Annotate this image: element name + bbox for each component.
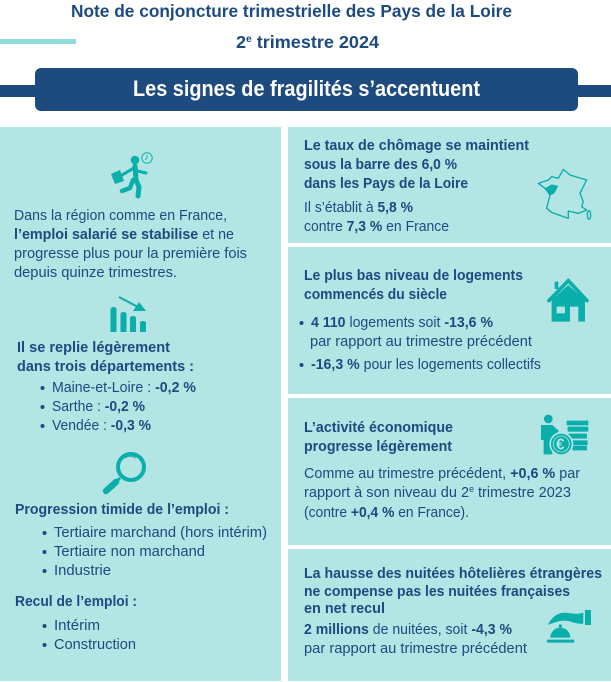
departments text: Sarthe : -0,2 % [52,398,145,415]
text: activite: Comme au trimestre précédent, +0,6 % par [304,465,580,482]
icon: running man [111,153,152,196]
text: nuitees: par rapport au trimestre précédent [304,640,528,657]
banner [35,68,578,111]
heading: activite [304,419,453,455]
recul list [15,593,137,653]
heading: nuitees [304,565,602,617]
heading: nuitees: ne compense pas les nuitées françaises [304,583,570,600]
list: logements [300,314,541,373]
list: logements: par rapport au trimestre précédent [310,333,533,350]
heading: logements: commencés du siècle [304,286,447,303]
progression list: Tertiaire non marchand [54,543,205,560]
title: Note de conjoncture trimestrielle des Pays de la Loire [71,1,512,21]
recul list: Construction [54,636,136,653]
text: activite: e [469,484,474,494]
text: chomage: contre 7,3 % en France [304,218,449,235]
intro text: progresse plus pour la première fois [14,245,247,262]
text: chomage [304,199,449,235]
icon: hand and service bell [547,610,591,643]
icon: house [549,281,587,322]
text: activite: (contre +0,4 % en France). [304,504,469,521]
intro text: l’emploi salarié se stabilise et ne [14,226,234,243]
panel: nuitees [288,549,611,681]
title: trimestre 2024 [252,32,379,52]
icon: person with euro coins: € [556,437,565,454]
panel: activite [288,398,611,545]
intro text [14,207,247,281]
text: chomage: Il s’établit à 5,8 % [304,199,413,216]
departments text: Maine-et-Loire : -0,2 % [52,379,196,396]
heading: chomage: dans les Pays de la Loire [304,175,468,192]
recul list: Intérim [54,617,100,634]
title: 2 [236,32,246,52]
list: logements: 4 110 logements soit -13,6 % [311,314,493,331]
title [71,1,512,52]
icon: falling bars [110,297,146,332]
progression list: Tertiaire marchand (hors intérim) [54,524,267,541]
icon: map of France [538,169,591,219]
icon: person with euro coins [541,415,588,456]
departments text: Vendée : -0,3 % [52,417,151,434]
text: nuitees [304,621,528,657]
text: activite [304,465,580,521]
intro text: Dans la région comme en France, [14,207,227,224]
icon: magnifier [106,454,144,491]
heading: activite: L’activité économique [304,419,453,436]
panel: chomage [288,127,611,243]
text: nuitees: 2 millions de nuitées, soit -4,3 % [304,621,512,638]
heading: activite: progresse légèrement [304,438,452,455]
heading: nuitees: en net recul [304,600,385,617]
intro text: depuis quinze trimestres. [14,264,177,281]
progression list: Progression timide de l’emploi : [15,501,229,518]
heading: chomage: sous la barre des 6,0 % [304,156,457,173]
panel: logements [288,247,611,394]
text: activite: trimestre 2023 [474,484,571,501]
title: e [246,34,252,45]
heading: nuitees: La hausse des nuitées hôtelières étrangères [304,565,602,582]
heading: chomage [304,137,529,192]
panel: emploi [0,127,281,681]
heading: logements [304,267,523,303]
departments text: Il se replie légèrement [17,339,170,356]
banner: Les signes de fragilités s’accentuent [133,76,481,101]
progression list [15,501,267,579]
progression list: Industrie [54,562,111,579]
text: activite: rapport à son niveau du 2 [304,484,474,501]
heading: logements: Le plus bas niveau de logements [304,267,523,284]
departments text [17,339,196,434]
departments text: dans trois départements : [17,358,194,375]
list: logements: -16,3 % pour les logements collectifs [311,356,541,373]
heading: chomage: Le taux de chômage se maintient [304,137,529,154]
recul list: Recul de l’emploi : [15,593,137,610]
